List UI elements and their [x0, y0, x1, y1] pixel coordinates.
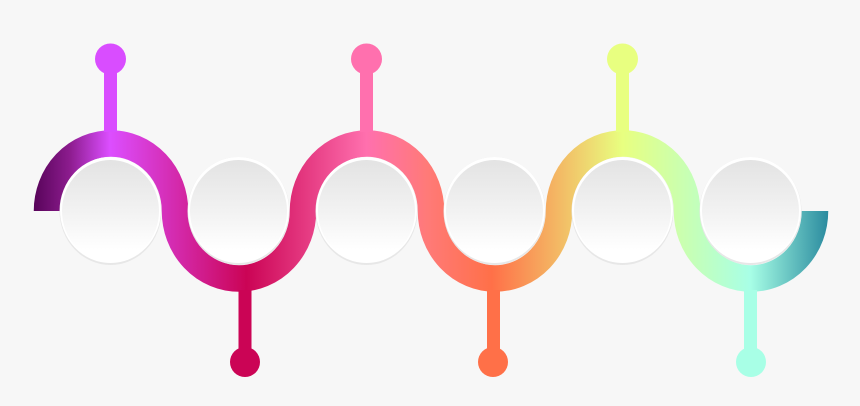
disc 6 [700, 157, 802, 265]
pin 6: mint, bottom [736, 290, 766, 377]
disc 1 [60, 157, 162, 265]
disc 4 [444, 157, 546, 265]
wave ribbon [47, 143, 815, 278]
disc 5 [572, 157, 674, 265]
pin 1: purple, top [95, 44, 126, 132]
pin 5: yellow-green, top [607, 44, 638, 132]
disc 3 [316, 157, 418, 265]
pin 4: orange, bottom [478, 290, 508, 377]
pin 2: crimson, bottom [230, 290, 260, 377]
pin 3: pink, top [351, 44, 382, 132]
disc 2 [188, 157, 290, 265]
